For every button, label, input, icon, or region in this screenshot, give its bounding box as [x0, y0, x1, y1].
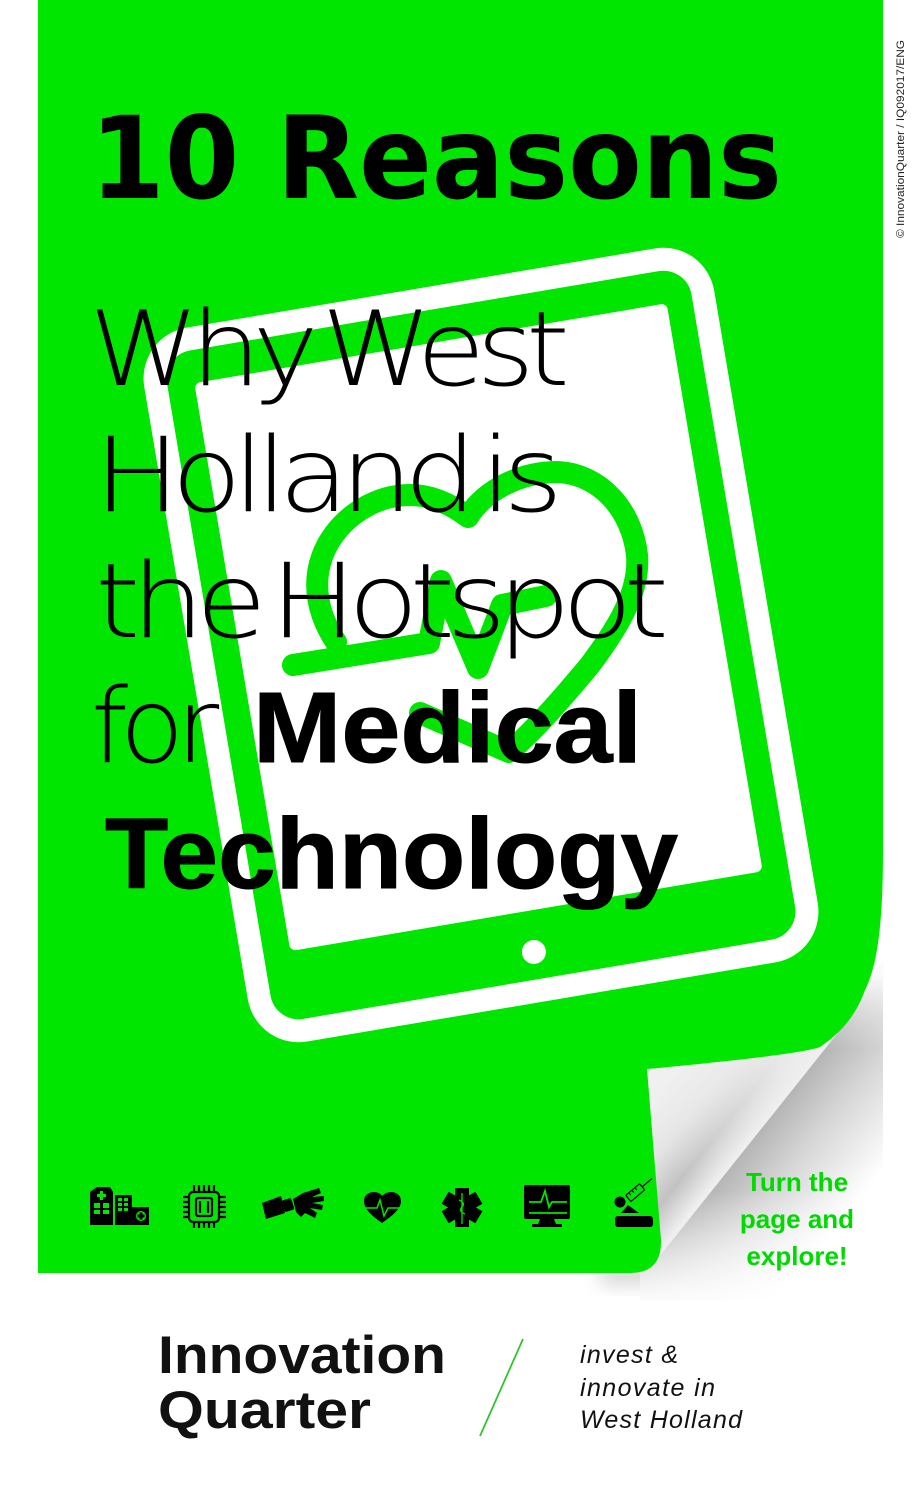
logo: Innovation Quarter	[158, 1326, 446, 1440]
logo divider slash	[480, 1339, 523, 1436]
subtitle: Technology	[105, 798, 678, 910]
subtitle: for	[91, 667, 220, 787]
icon: heart rate monitor	[524, 1185, 570, 1227]
logo: Innovation Quarter: Quarter	[158, 1381, 371, 1440]
callout: turn the page: explore!	[746, 1241, 848, 1271]
subtitle: the Hotspot	[95, 542, 664, 662]
callout: turn the page: Turn the	[746, 1167, 848, 1197]
green page panel	[38, 0, 883, 1273]
title: 10 Reasons: 10 Reasons	[90, 92, 782, 225]
tagline: invest &	[580, 1341, 678, 1369]
callout: turn the page	[740, 1167, 854, 1271]
subtitle: Why West	[89, 290, 565, 410]
icon: microchip	[183, 1185, 226, 1228]
callout: turn the page: page and	[740, 1204, 854, 1234]
icon: hospital buildings	[90, 1187, 149, 1225]
icon: heart with pulse line	[293, 472, 637, 752]
subtitle: Medical	[253, 672, 642, 784]
logo: Innovation Quarter: Innovation	[158, 1326, 446, 1385]
icon: star of life	[442, 1188, 482, 1227]
icon: heart with pulse	[364, 1192, 401, 1223]
subtitle	[89, 290, 678, 910]
tagline: innovate in	[580, 1374, 715, 1402]
icon: tablet	[149, 253, 813, 1037]
subtitle: Holland is	[94, 416, 555, 536]
tagline: West Holland	[580, 1406, 743, 1434]
tagline	[580, 1341, 743, 1434]
page curl shadow	[600, 940, 917, 1320]
icon: hand with smartwatch	[262, 1188, 324, 1219]
copyright notice: © InnovationQuarter / IQ092017/ENG	[895, 40, 907, 238]
icon: syringe and drop	[614, 1175, 655, 1227]
